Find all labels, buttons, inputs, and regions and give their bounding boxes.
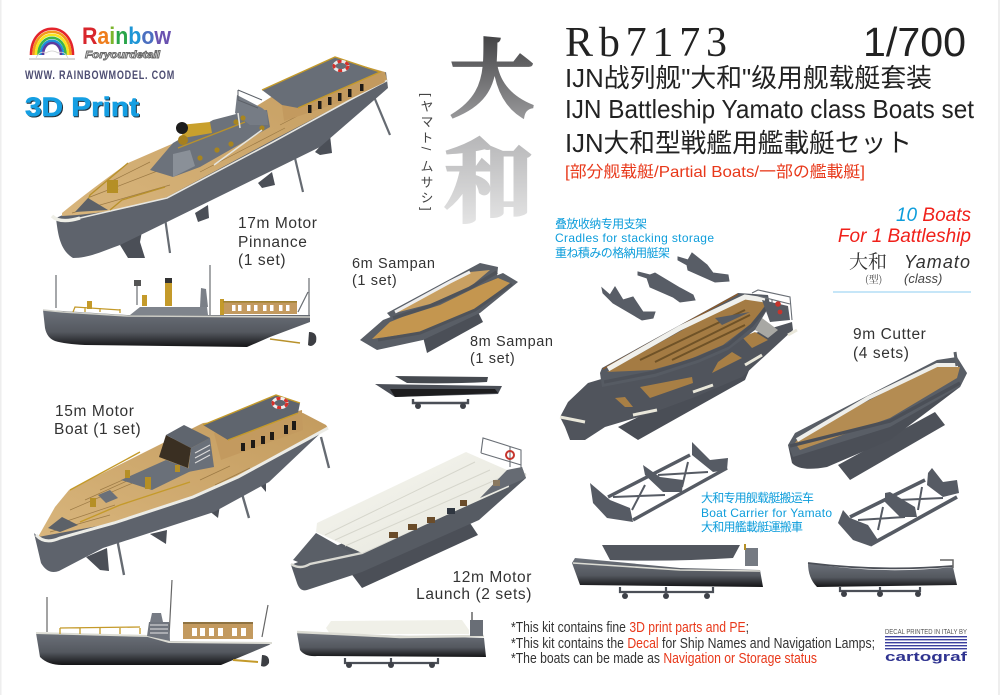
boat: 15m Motor Boat side view xyxy=(36,580,272,667)
boat: 17m Motor Pinnance side view xyxy=(43,265,316,347)
label: 8m Sampan: 8m Sampan xyxy=(470,334,554,350)
boat: 12m Motor Launch side view xyxy=(297,612,486,668)
boat: 15m Motor Boat perspective xyxy=(34,395,329,575)
boat: 9m Cutter stacked on launch xyxy=(560,290,797,440)
callout: cradles: 重ね積みの格納用艇架 xyxy=(555,245,670,260)
calligraphy: Yamato kanji: 和 xyxy=(444,110,534,240)
class name kanji: 大和 xyxy=(849,247,887,274)
callout: cradles: 叠放收纳专用支架 xyxy=(555,216,647,231)
boat: 9m Cutter xyxy=(788,352,967,480)
label: 12m Motor Launch: Launch (2 sets) xyxy=(416,586,532,603)
title Chinese: IJN战列舰"大和"级用舰载艇套装 xyxy=(565,63,932,93)
callout: cradles xyxy=(555,216,714,260)
callout: boat carrier: 大和专用舰载艇搬运车 xyxy=(701,490,814,505)
cradle 3 xyxy=(602,287,655,320)
boat: stacked side view on carrier xyxy=(572,544,763,599)
callout: boats count: 10 Boats xyxy=(896,205,971,226)
subtitle partial boats: [部分舰载艇/Partial Boats/一部の艦載艇] xyxy=(565,163,865,181)
kit notes: *This kit contains fine 3D print parts and PE; xyxy=(511,620,749,636)
label: 6m Sampan: 6m Sampan xyxy=(352,256,436,272)
website: WWW. RAINBOWMODEL. COM xyxy=(25,68,175,82)
class name kanji xyxy=(849,247,887,286)
cradles xyxy=(602,253,729,320)
scale: 1/700 xyxy=(863,19,966,65)
title English: IJN Battleship Yamato class Boats set xyxy=(565,94,975,124)
vertical katakana: [ヤマト/ ムサシ] xyxy=(418,93,434,213)
kit notes: *The boats can be made as Navigation or Storage status xyxy=(511,651,817,667)
logo: Rainbow xyxy=(25,23,175,82)
label: 17m Motor Pinnance: (1 set) xyxy=(238,252,286,269)
logo wordmark: Rainbow xyxy=(82,23,171,50)
class name kanji: (型) xyxy=(865,271,882,286)
boat: sampans perspective xyxy=(360,263,518,353)
boat: 12m Motor Launch perspective xyxy=(291,438,526,590)
callout: boat carrier xyxy=(701,490,832,534)
callout: boats count: Yamato xyxy=(904,252,970,272)
badge: 3D Print: 3D Print xyxy=(25,92,139,122)
callout: boats count: For 1 Battleship xyxy=(838,226,971,247)
label: 15m Motor Boat: Boat (1 set) xyxy=(54,421,141,438)
label: 17m Motor Pinnance: 17m Motor xyxy=(238,215,317,232)
callout: boat carrier: 大和用艦載艇運搬車 xyxy=(701,520,803,534)
boat: sampans side view xyxy=(375,376,502,409)
logo tagline: Foryourdetail xyxy=(85,50,160,61)
label: 9m Cutter: (4 sets) xyxy=(853,345,909,362)
callout: cradles: Cradles for stacking storage xyxy=(555,231,714,245)
callout: boats count: (class) xyxy=(904,271,942,286)
product code: Rb7173 xyxy=(565,20,727,66)
kit notes: *This kit contains the Decal for Ship Names and Navigation Lamps; xyxy=(511,636,875,652)
cradle 1 xyxy=(678,253,729,282)
boat carrier left xyxy=(590,442,728,522)
callout: boat carrier: Boat Carrier for Yamato xyxy=(701,506,832,520)
label: 8m Sampan: (1 set) xyxy=(470,351,515,367)
cradle 2 xyxy=(638,272,695,302)
logo: cartograf: cartograf xyxy=(885,649,968,664)
callout: boats count xyxy=(838,205,971,286)
heading block xyxy=(565,19,975,181)
calligraphy: Yamato kanji: 大 xyxy=(450,13,534,134)
logo: cartograf xyxy=(885,629,968,664)
logo: cartograf: DECAL PRINTED IN ITALY BY xyxy=(885,629,967,636)
title Japanese: IJN大和型戦艦用艦載艇セット xyxy=(565,128,912,158)
label: 17m Motor Pinnance: Pinnance xyxy=(238,234,307,251)
kit notes xyxy=(511,620,875,667)
label: 9m Cutter: 9m Cutter xyxy=(853,326,926,343)
icon: rainbow arcs xyxy=(29,29,75,59)
boat: 17m Motor Pinnance perspective xyxy=(52,57,390,258)
boat carrier right xyxy=(838,468,959,546)
label: 6m Sampan: (1 set) xyxy=(352,273,397,289)
boat: cutter side view on carrier xyxy=(808,560,957,597)
calligraphy: Yamato kanji xyxy=(444,13,534,240)
label: 15m Motor Boat: 15m Motor xyxy=(55,403,134,420)
label: 12m Motor Launch: 12m Motor xyxy=(453,569,532,586)
